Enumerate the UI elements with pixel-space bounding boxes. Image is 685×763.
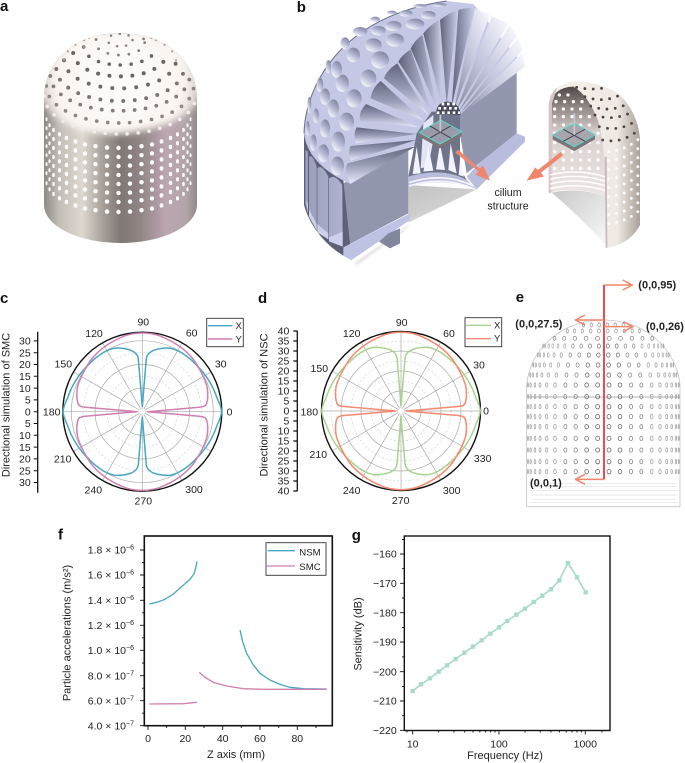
y tick labels: 8.0 × 10 [88,670,126,682]
angle labels: 300 [443,485,461,497]
outer holes lower [609,138,639,224]
angle labels: 120 [85,328,103,340]
base rings [408,172,477,189]
radial axis: 25 [278,456,289,468]
SMC series [149,672,327,704]
angle labels: 60 [186,328,198,340]
coordinate labels: (0,0,27.5) [515,318,563,330]
dome shell [304,1,525,184]
radial axis: 10 [19,430,31,442]
radial axis: 25 [19,465,31,477]
radial axis: 20 [19,359,31,371]
floor shadow [408,185,477,223]
label e: e [516,289,524,306]
radial axis: 40 [278,486,289,498]
curve X [322,347,480,475]
data line [413,563,586,691]
y axis title: Directional simulation of SMC [0,333,12,477]
y tick labels: −7 [126,695,134,702]
x tick labels: 20 [179,733,191,745]
y axis title: Directional simulation of NSC [258,333,270,477]
y tick labels: −190 [373,637,397,649]
legend [207,318,243,347]
angle labels: 90 [396,317,408,329]
radial axis: 25 [19,347,31,359]
outer shell [549,81,640,248]
angle labels: 90 [137,316,149,328]
radial axis: 20 [19,454,31,466]
y tick labels: −200 [373,666,397,678]
cilium structure label: cilium [494,187,522,199]
radial ribs [346,8,525,183]
radial axis: 15 [278,436,289,448]
label c: c [0,290,8,307]
y tick labels: −6 [126,645,134,652]
curved ribbed left base [304,133,352,260]
x tick labels: 0 [145,733,151,745]
angle labels: 270 [392,495,410,507]
radial axis: 0 [25,406,31,418]
legend [266,543,326,575]
angle labels: 150 [311,363,328,375]
cavity dome tip [436,102,461,115]
x tick labels: 1000 [574,739,597,751]
radial axis: 15 [19,371,31,383]
cilium structure label: structure [487,200,529,212]
x tick labels: 100 [490,739,508,751]
y tick labels: −6 [126,545,134,552]
y tick labels: 6.0 × 10 [88,695,126,707]
plot frame [144,536,332,726]
base stub [379,228,400,248]
panel a: perforated dome [0,0,203,245]
coordinate labels: (0,0,95) [638,280,677,292]
curve X [63,348,222,475]
cylinder perforations [46,117,192,214]
x axis title: Z axis (mm) [207,749,265,761]
x tick labels: 60 [254,733,266,745]
angle labels: 240 [85,484,102,496]
shell holes [306,3,447,175]
rear ledge [467,133,525,189]
dome perforations [44,29,196,134]
curve Y [77,333,208,490]
legend: NSM [299,548,321,558]
y tick labels: 4.0 × 10 [88,720,126,732]
label g: g [352,527,361,544]
outer holes upper [577,87,639,141]
y tick labels: −220 [373,725,397,737]
angle labels: 240 [343,485,361,497]
panel f: particle acceleration chart [58,526,332,761]
y tick labels: −6 [126,595,134,602]
curves [149,561,327,704]
x tick labels: 10 [407,739,419,751]
label f: f [58,526,64,544]
radial axis: 30 [278,466,289,478]
panel e: sampling line diagram [515,280,684,507]
angle labels: 60 [443,328,455,340]
polar chart [63,332,222,491]
cilium sensor [553,113,595,151]
y tick labels: −210 [373,696,397,708]
radial axis: 5 [25,395,31,407]
central cavity [408,112,467,180]
cilium sensor [419,115,462,148]
legend: X [236,321,242,332]
panel g: sensitivity chart [352,527,610,762]
y tick labels: 1.0 × 10 [88,645,126,657]
wireframe outline [527,320,680,507]
panel c: polar plot SMC [0,290,243,508]
radial axis: 0 [283,406,289,418]
radial axis [19,332,38,493]
legend: Y [494,334,501,344]
y tick labels: −6 [126,570,134,577]
y tick labels: 1.8 × 10 [88,545,126,557]
base ledge [343,213,410,260]
arrows [575,280,633,484]
rear wall [457,72,517,173]
coordinate labels: (0,0,1) [530,478,562,490]
radial axis: 25 [278,356,289,368]
dome shell body [44,33,197,243]
radial axis [278,326,297,498]
plot frame [404,536,610,730]
radial axis: 35 [278,476,289,488]
hole rows [527,323,679,474]
red sampling line [601,285,607,479]
polar chart [322,332,480,490]
y tick labels: 1.6 × 10 [88,570,126,582]
angle labels: 300 [185,484,203,496]
x axis title: Frequency (Hz) [467,750,543,762]
angle labels: 210 [310,449,327,461]
angle labels: 30 [215,358,227,370]
radial axis: 15 [19,442,31,454]
y tick labels: −7 [126,670,134,677]
radial axis: 30 [19,336,31,348]
radial axis: 5 [283,416,289,428]
axis ticks [140,550,316,730]
large cutaway model [304,1,525,267]
radial axis: 15 [278,376,289,388]
y tick labels [88,545,134,732]
x tick labels: 80 [291,733,303,745]
angle labels: 270 [135,496,152,508]
angle labels: 180 [43,407,61,419]
axis ticks [400,540,602,734]
y tick labels: 1.2 × 10 [88,620,126,632]
front wall [343,150,408,247]
angle labels: 30 [473,360,485,372]
radial axis: 5 [283,396,289,408]
y tick labels: −6 [126,620,134,627]
y tick labels: −170 [373,578,397,590]
radial axis: 30 [278,346,289,358]
radial axis: 5 [25,418,31,430]
sensor arrow right [527,152,563,181]
legend: SMC [299,562,321,573]
small cutaway model [527,81,640,248]
coordinate labels: (0,0,26) [646,321,684,333]
angle labels: 120 [343,328,361,340]
legend: Y [236,334,242,346]
label d: d [258,290,267,307]
floor shadow [552,190,606,245]
panel b: cutaway models [297,0,640,267]
radial axis: 30 [19,477,31,489]
sensor arrow left [455,150,490,181]
interior rings [550,172,605,190]
angle labels: 330 [474,453,492,465]
shell interior [549,87,606,197]
angle labels: 210 [54,454,72,466]
angle labels: 0 [227,406,233,418]
interior holes [555,95,603,168]
radial axis: 35 [278,336,289,348]
radial axis: 10 [278,386,289,398]
y tick labels: −180 [373,607,397,619]
x tick labels: 40 [217,733,229,745]
radial axis: 20 [278,446,289,458]
angle labels: 150 [55,358,72,370]
radial axis: 10 [19,383,31,395]
NSM series [149,561,327,689]
radial axis: 40 [278,326,289,338]
legend [465,318,502,347]
angle labels: 0 [483,406,489,418]
y tick labels: 1.4 × 10 [88,595,126,607]
y tick labels: −7 [126,720,134,727]
y axis title: Sensitivity (dB) [352,597,364,671]
panel d: polar plot NSC [258,290,502,507]
base contour lines [530,483,678,503]
curve Y [336,332,466,490]
radial axis: 20 [278,366,289,378]
angle labels: 180 [301,406,318,418]
y tick labels: −160 [373,549,397,561]
radial axis: 10 [278,426,289,438]
legend: X [494,320,501,332]
y axis title: Particle accelerations (m/s²) [62,565,74,701]
